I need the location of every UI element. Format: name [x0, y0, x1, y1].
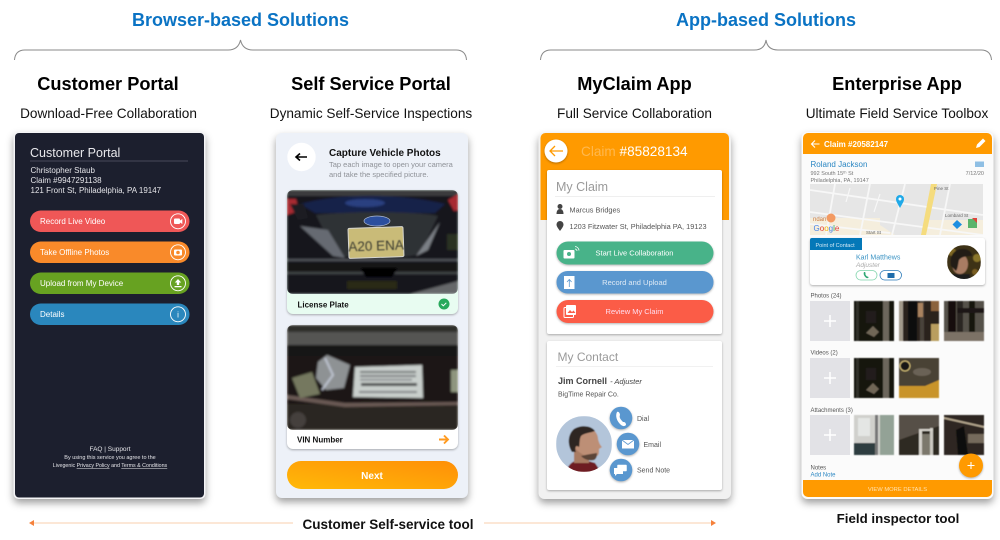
gallery: photos: [810, 301, 984, 341]
heading: Browser-based Solutions: Browser-based Solutions: [132, 10, 349, 30]
footer links: By using this service you agree to the: [64, 455, 156, 461]
instructions: Capture Vehicle Photos: [329, 148, 441, 159]
customer details: 992 South 15ᵗʰ St: [810, 170, 854, 177]
button: Next: [287, 461, 458, 489]
icon: phone: [610, 407, 632, 429]
label: Send Note: Send Note: [637, 468, 670, 474]
customer details: 7/12/20: [966, 171, 984, 177]
button: Details: i: [177, 310, 179, 320]
photo: contact portrait: [556, 416, 612, 472]
panel: MyClaim App phone screen: [538, 133, 731, 499]
button: view more details: [803, 480, 992, 497]
claim details: 121 Front St, Philadelphia, PA 19147: [30, 186, 162, 195]
contact text: Adjuster: [855, 262, 881, 269]
map: Pine St: [934, 186, 949, 191]
button: Upload from My Device: Upload from My Device: [40, 279, 124, 288]
section label: Videos: Videos (2): [810, 350, 838, 356]
heading: App-based Solutions: App-based Solutions: [676, 10, 856, 30]
icon: green check: [438, 298, 450, 310]
subtitle: Ultimate Field Service Toolbox: Ultimate Field Service Toolbox: [806, 106, 988, 121]
footer links: [53, 446, 168, 469]
thumbnail: [854, 301, 894, 341]
gallery: videos: [810, 358, 939, 398]
icon: send note: [610, 459, 632, 481]
thumbnail: [854, 415, 894, 455]
button: view more details: VIEW MORE DETAILS: [868, 487, 927, 493]
customer details: Philadelphia, PA, 19147: [810, 178, 869, 184]
header bar: Claim #20582147: [824, 140, 889, 149]
product title: Self Service Portal: Self Service Portal: [291, 74, 451, 94]
icon: orange arrow: [439, 436, 448, 444]
card heading: My Contact: [558, 350, 619, 364]
notes: Add Note: [810, 472, 836, 478]
contact name: Jim Cornell - Adjuster: [558, 376, 642, 386]
brace: app-based: [540, 40, 992, 60]
contact text: Karl Matthews: [856, 254, 901, 262]
claim details: Christopher Staub: [30, 166, 96, 175]
subtitle: Download-Free Collaboration: Download-Free Collaboration: [20, 106, 197, 121]
section label: Photos: Photos (24): [810, 294, 842, 300]
button: Record and Upload: Record and Upload: [602, 278, 667, 287]
contact text: [855, 254, 901, 269]
label: VIN Number: [297, 436, 343, 444]
thumbnail: [854, 358, 894, 398]
map: Start St: [866, 230, 882, 235]
floating add button: [959, 454, 983, 478]
footer links: FAQ | Support: [89, 446, 131, 453]
button: email: [880, 270, 902, 280]
tab: Point of Contact: [816, 243, 855, 249]
map: ndan: [813, 217, 826, 223]
subtitle: Dynamic Self-Service Inspections: Dynamic Self-Service Inspections: [270, 106, 472, 121]
photo: VIN sticker: [287, 325, 458, 430]
label: Email: Email: [644, 442, 661, 449]
gallery: attachments: [810, 415, 984, 455]
header bar: [803, 133, 992, 154]
address: 1203 Fitzwater St, Philadelphia PA, 19123: [570, 222, 707, 231]
button: Take Offline Photos: [30, 242, 190, 263]
brace: browser-based: [14, 40, 466, 60]
button: Start Live Collaboration: Start Live Collaboration: [596, 248, 673, 258]
map: [810, 184, 983, 235]
thumbnail: [899, 301, 939, 341]
add photo tile: [810, 301, 850, 341]
subtitle: Full Service Collaboration: Full Service Collaboration: [557, 106, 712, 121]
back button: [287, 143, 316, 171]
instructions: [329, 148, 454, 179]
customer details: Roland Jackson: [810, 160, 867, 169]
arrow: customer self-service range: [29, 520, 716, 526]
footer links: Livegenic Privacy Policy and Terms & Conditions: [53, 463, 168, 469]
map: Google: [814, 224, 840, 233]
card: My Claim: [547, 170, 722, 334]
back button: [544, 140, 568, 162]
label: Field inspector tool: Field inspector tool: [837, 511, 959, 526]
panel: Self Service Portal phone screen: [276, 133, 468, 498]
panel: Customer Portal phone screen: [14, 132, 206, 499]
photo: license plate on car: [287, 190, 458, 294]
icon: email: [617, 433, 639, 455]
card: point of contact: [810, 238, 985, 285]
product title: MyClaim App: MyClaim App: [577, 74, 692, 94]
notes: [810, 466, 836, 478]
customer details: [810, 160, 984, 184]
claim details: Claim #9947291138: [30, 176, 102, 185]
claim details: [30, 166, 162, 195]
card heading: My Claim: [556, 180, 608, 194]
label: Customer Self-service tool: Customer Self-service tool: [302, 517, 474, 532]
label: License Plate: [298, 300, 349, 310]
map: Lombard St: [945, 213, 969, 218]
button: Review My Claim: Review My Claim: [606, 307, 663, 316]
panel: Enterprise App phone screen: [802, 132, 994, 499]
add video tile: [810, 358, 850, 398]
button: Next: Next: [361, 471, 384, 482]
claim number: Claim #85828134: [581, 144, 688, 159]
card: VIN Number: [287, 325, 458, 449]
product title: Customer Portal: Customer Portal: [37, 74, 179, 94]
button: Details: [30, 304, 190, 325]
button: Take Offline Photos: Take Offline Photos: [40, 248, 109, 257]
thumbnail: [944, 301, 984, 341]
button: Upload from My Device: [30, 272, 190, 294]
instructions: and take the specified picture.: [329, 170, 429, 179]
photo: license plate on car: A20 ENA: [348, 238, 404, 254]
instructions: Tap each image to open your camera: [329, 160, 454, 169]
thumbnail: [899, 415, 939, 455]
button: call: [856, 270, 877, 280]
card: My Contact: [547, 341, 722, 490]
section label: Attachments: Attachments (3): [810, 408, 853, 414]
add attachment tile: [810, 415, 850, 455]
contact name: [556, 204, 621, 214]
company: BigTime Repair Co.: [558, 392, 619, 398]
thumbnail: [899, 358, 939, 398]
button: Start Live Collaboration: [556, 242, 714, 264]
contact name: Marcus Bridges: [570, 206, 621, 214]
screen title: Customer Portal: [30, 146, 120, 160]
card: License Plate: [287, 190, 458, 314]
button: Record Live Video: [30, 210, 190, 232]
photo: contact avatar: [947, 245, 981, 280]
label: Dial: Dial: [637, 416, 650, 423]
button: Details: Details: [40, 310, 64, 319]
button: Review My Claim: [556, 300, 714, 323]
button: Record Live Video: Record Live Video: [40, 217, 106, 226]
product title: Enterprise App: Enterprise App: [832, 74, 962, 94]
notes: Notes: [810, 466, 826, 472]
tab: [810, 238, 862, 250]
thumbnail: [944, 415, 984, 455]
button: Record and Upload: [556, 271, 714, 294]
